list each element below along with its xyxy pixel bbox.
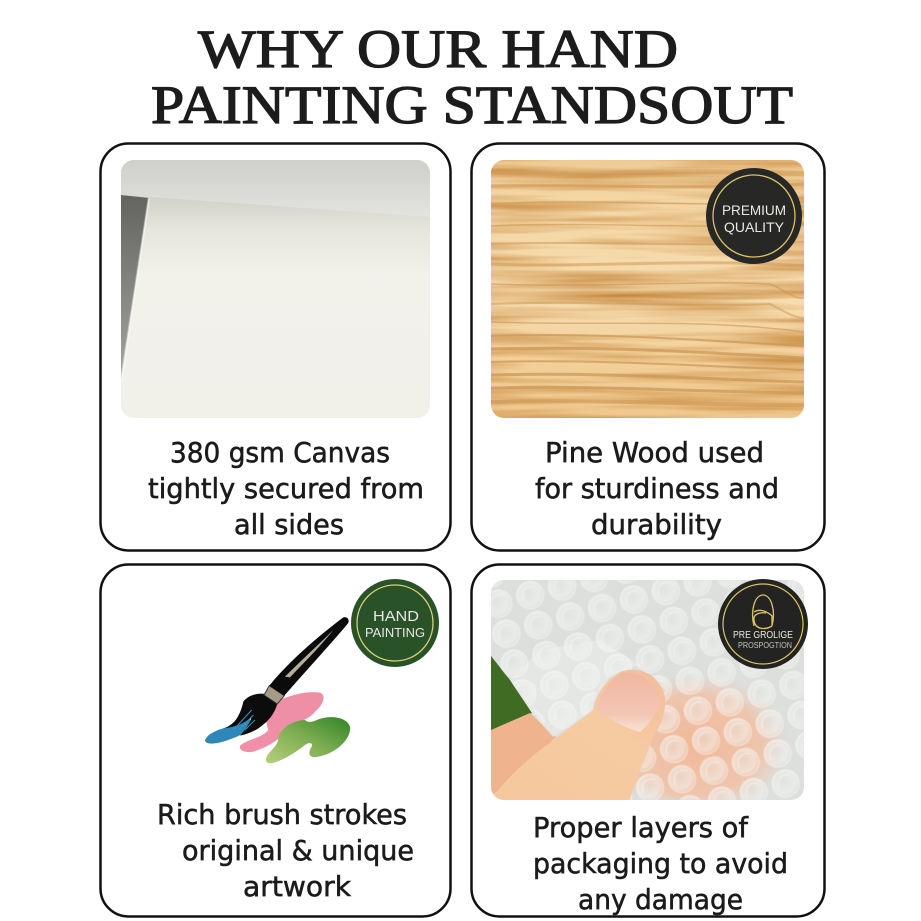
brush ferrule <box>264 686 284 704</box>
caption: hand painting <box>157 798 414 903</box>
canvas lit edge <box>121 198 149 382</box>
photo: pine wood grain <box>491 160 804 418</box>
title: PAINTING STANDSOUT <box>151 75 793 135</box>
caption: hand painting: Rich brush strokes <box>157 798 407 831</box>
caption: packaging <box>533 811 788 916</box>
canvas rolled edge <box>121 160 430 217</box>
caption: hand painting: artwork <box>243 870 352 903</box>
panel: pine wood <box>472 144 824 550</box>
skin tone through wrap <box>633 680 782 800</box>
caption: canvas: 380 gsm Canvas <box>170 436 390 469</box>
thumbnail <box>597 673 660 732</box>
caption: pine wood <box>535 436 779 541</box>
bubbles <box>491 580 804 800</box>
caption: packaging: any damage <box>578 883 743 916</box>
brush bristles <box>223 694 277 736</box>
thumb <box>491 670 665 800</box>
badge: hand painting: PAINTING <box>365 626 425 640</box>
badge: packaging <box>718 579 808 669</box>
badge: hand painting <box>351 579 439 667</box>
caption: packaging: Proper layers of <box>533 811 749 844</box>
finger behind wrap <box>491 713 556 800</box>
badge: hand painting: HAND <box>373 608 419 625</box>
dark gap at canvas side <box>121 195 149 382</box>
caption: hand painting: original & unique <box>182 834 414 867</box>
badge: packaging: PROSPOGTION <box>738 641 792 650</box>
badge: premium quality <box>706 168 802 264</box>
caption: canvas <box>148 436 424 541</box>
title <box>151 19 793 135</box>
caption: pine wood: Pine Wood used <box>545 436 764 469</box>
badge: premium quality: PREMIUM <box>722 202 786 218</box>
green paint stroke <box>266 717 350 763</box>
caption: pine wood: for sturdiness and <box>535 472 779 505</box>
caption: pine wood: durability <box>591 508 722 541</box>
panel: canvas <box>100 144 450 550</box>
pink paint stroke <box>240 692 324 752</box>
caption: canvas: tightly secured from <box>148 472 424 505</box>
photo: bubble wrap held by hand <box>491 580 804 817</box>
photo: white canvas sheet <box>121 160 430 418</box>
badge: premium quality: QUALITY <box>724 219 785 235</box>
pale wrap fold near thumb <box>510 680 582 737</box>
title: WHY OUR HAND <box>198 19 678 79</box>
panel: hand painting <box>100 564 450 916</box>
blue bristle streaks <box>233 710 255 730</box>
badge: packaging: PRE GROLIGE <box>733 629 793 641</box>
caption: canvas: all sides <box>234 508 344 541</box>
icon: paint brush and colour strokes <box>205 617 350 763</box>
blue brush tip <box>205 713 253 744</box>
badge monogram <box>753 595 773 628</box>
caption: packaging: packaging to avoid <box>533 847 788 880</box>
green background corner <box>491 656 532 732</box>
panel: packaging <box>472 564 824 916</box>
brush handle <box>269 617 349 696</box>
